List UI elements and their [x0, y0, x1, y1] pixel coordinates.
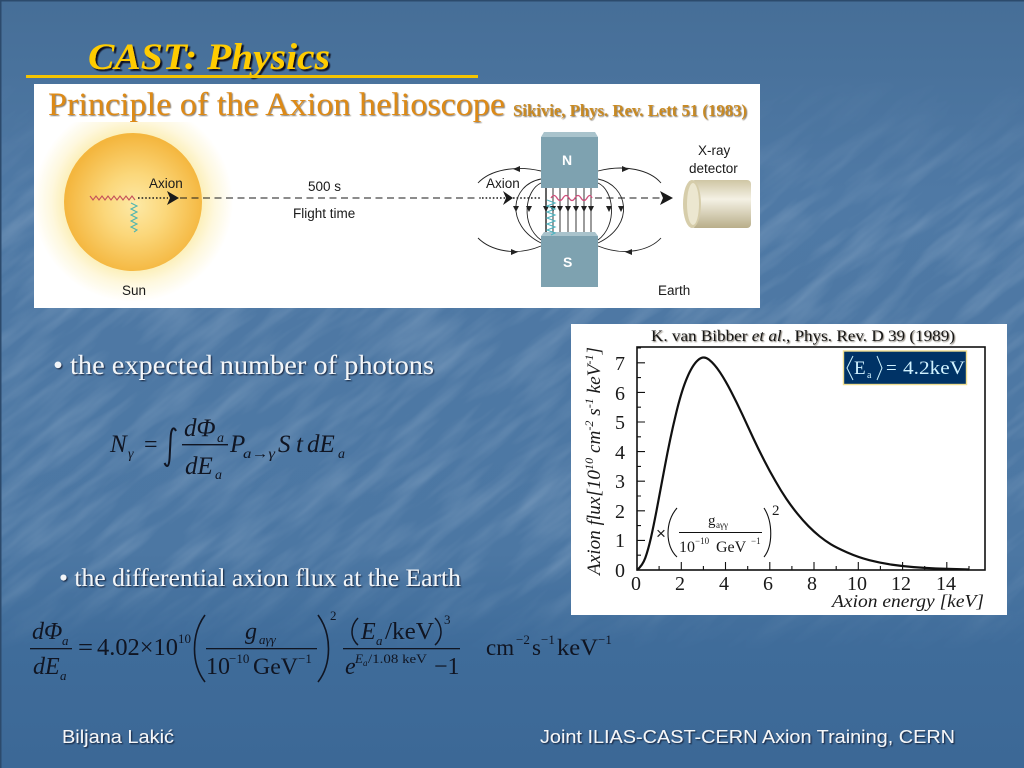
heading: principle: Principle of the Axion helioscope: [48, 87, 505, 123]
equation: differential axion flux: =: [78, 635, 93, 661]
flux curve: [637, 358, 969, 570]
y axis tick labels: 1: [615, 530, 625, 552]
equation: number of photons: =: [144, 432, 158, 458]
arrow: axion flight path: [138, 191, 673, 205]
label: Earth: Earth: [658, 283, 690, 298]
equation: differential axion flux: 2: [330, 608, 336, 623]
coupling scale factor: 10: [679, 539, 695, 556]
equation: differential axion flux: E: [354, 651, 363, 666]
wave: teal photon in sun: [131, 203, 137, 232]
coupling scale factor: [656, 503, 780, 557]
y axis tick labels: 0: [615, 560, 625, 582]
y axis tick labels: 3: [615, 471, 625, 493]
label: Axion at magnet: Axion: [486, 176, 520, 191]
equation: number of photons: S: [278, 431, 291, 458]
equation: number of photons: dΦ: [184, 415, 216, 442]
equation: number of photons: a: [215, 468, 222, 483]
x axis tick labels: 6: [763, 573, 773, 595]
panel: axion flux chart: [571, 324, 1007, 615]
callout: mean axion energy: E: [854, 358, 866, 379]
y axis label: cm: [584, 431, 605, 458]
axis ticks: [637, 348, 969, 570]
y axis label: s: [584, 408, 605, 421]
wave: teal photon in magnet: [547, 200, 555, 235]
x axis tick labels: 0: [631, 573, 641, 595]
equation: differential axion flux: −1: [598, 632, 612, 647]
footer: author: Biljana Lakić: [62, 726, 174, 747]
equation: differential axion flux: a: [363, 658, 368, 668]
equation: differential axion flux: −1: [298, 651, 312, 666]
equation: differential axion flux: aγγ: [259, 632, 277, 647]
label: 500 s: 500 s: [308, 179, 341, 194]
equation: differential axion flux: 10: [178, 631, 191, 646]
coupling scale factor: −1: [751, 536, 761, 546]
citation: Sikivie: Sikivie, Phys. Rev. Lett 51 (1983): [513, 101, 747, 120]
coupling scale factor: −10: [695, 536, 710, 546]
y axis tick labels: [615, 353, 625, 582]
bullet: differential axion flux: • the differential axion flux at the Earth: [59, 565, 462, 592]
icon: x-ray detector: [683, 180, 751, 228]
equation: number of photons: a→γ: [243, 447, 276, 462]
coupling scale factor: GeV: [716, 539, 747, 556]
callout: mean axion energy: 4.2keV: [903, 358, 965, 379]
coupling scale factor: 2: [772, 503, 780, 519]
magnet: south pole: S: [563, 254, 572, 270]
coupling scale factor: g: [708, 513, 716, 529]
magnet: north pole: N: [562, 152, 572, 168]
title underline: [26, 75, 478, 78]
callout: mean axion energy: [844, 351, 966, 384]
equation: differential axion flux: dE: [33, 654, 60, 680]
coupling scale factor: aγγ: [716, 520, 728, 530]
equation: number of photons: a: [217, 431, 224, 446]
equation: differential axion flux: 10: [206, 654, 230, 680]
equation: differential axion flux: 4.02×10: [97, 634, 178, 661]
equation: differential axion flux: 3: [444, 612, 450, 627]
equation: number of photons: γ: [128, 447, 134, 462]
equation: number of photons: P: [229, 431, 245, 458]
y axis label: -1: [582, 354, 596, 365]
label: X-ray detector: [689, 143, 738, 176]
equation: differential axion flux: dΦ: [32, 619, 62, 645]
y axis label: -2: [582, 421, 596, 431]
magnetic field lines: [478, 168, 661, 251]
equation: differential axion flux: −1: [541, 632, 555, 647]
y axis label: ]: [584, 347, 605, 355]
equation: differential axion flux: GeV: [253, 654, 298, 680]
y axis label: 10: [582, 458, 596, 470]
field line arrowheads: [511, 166, 632, 255]
footer: event: Joint ILIAS-CAST-CERN Axion Training, CERN: [540, 726, 955, 747]
equation: differential axion flux: /keV: [385, 619, 435, 645]
equation: number of photons: a: [338, 447, 345, 462]
y axis tick labels: 2: [615, 501, 625, 523]
label: Sun: Sun: [122, 283, 146, 298]
icon: sun: [34, 122, 234, 308]
equation: differential axion flux: keV: [557, 635, 598, 660]
magnet: south pole: [541, 232, 598, 287]
magnet: north pole: [541, 132, 598, 188]
y axis label: -1: [582, 398, 596, 408]
equation: differential axion flux: −1: [434, 654, 460, 680]
x axis tick labels: 8: [807, 573, 817, 595]
x axis tick labels: 4: [719, 573, 729, 595]
bullet: expected number of photons: • the expected number of photons: [53, 349, 434, 380]
equation: number of photons: dE: [307, 431, 335, 458]
x axis tick labels: 14: [936, 573, 956, 595]
equation: differential axion flux: e: [345, 654, 356, 680]
label: flight time: Flight time: [293, 206, 355, 221]
equation: differential axion flux: E: [360, 619, 376, 645]
equation: differential axion flux: cm: [486, 635, 514, 660]
equation: differential axion flux: a: [376, 633, 383, 648]
callout: mean axion energy: =: [886, 358, 897, 379]
x axis label: Axion energy [keV]: [831, 591, 984, 611]
plot frame: [637, 347, 985, 570]
equation: number of photons: [109, 415, 345, 483]
y axis label: keV: [584, 362, 605, 398]
equation: differential axion flux: s: [532, 635, 541, 660]
equation: number of photons: t: [296, 431, 304, 458]
equation: differential axion flux: /1.08 keV: [368, 651, 428, 666]
equation: number of photons: N: [109, 431, 128, 458]
x axis tick labels: 10: [847, 573, 867, 595]
x axis tick labels: 2: [675, 573, 685, 595]
coupling scale factor: ×: [656, 524, 666, 543]
label: Axion in sun: Axion: [149, 176, 183, 191]
equation: differential axion flux: [30, 608, 612, 683]
wave: red photon in sun: [90, 196, 135, 200]
equation: differential axion flux: a: [62, 633, 69, 648]
equation: differential axion flux: g: [245, 619, 257, 645]
title: CAST: Physics: [88, 37, 330, 78]
y axis tick labels: 5: [615, 412, 625, 434]
equation: differential axion flux: a: [60, 668, 67, 683]
equation: number of photons: dE: [185, 453, 213, 480]
callout: mean axion energy: a: [867, 370, 872, 381]
wave: red photon in magnet: [551, 196, 592, 200]
y axis tick labels: 6: [615, 383, 625, 405]
label: X-ray detector: X-ray: [698, 143, 731, 158]
equation: differential axion flux: −10: [229, 651, 249, 666]
y axis tick labels: 4: [615, 442, 625, 464]
panel: axion helioscope principle: [34, 84, 760, 308]
x axis tick labels: [631, 573, 956, 595]
label: X-ray detector: detector: [689, 161, 738, 176]
y axis label: Axion flux[10: [584, 471, 605, 575]
y axis tick labels: 7: [615, 353, 625, 375]
x axis tick labels: 12: [891, 573, 911, 595]
equation: differential axion flux: −2: [516, 632, 530, 647]
citation: van Bibber: K. van Bibber et al., Phys. Rev. D 39 (1989): [651, 328, 955, 345]
